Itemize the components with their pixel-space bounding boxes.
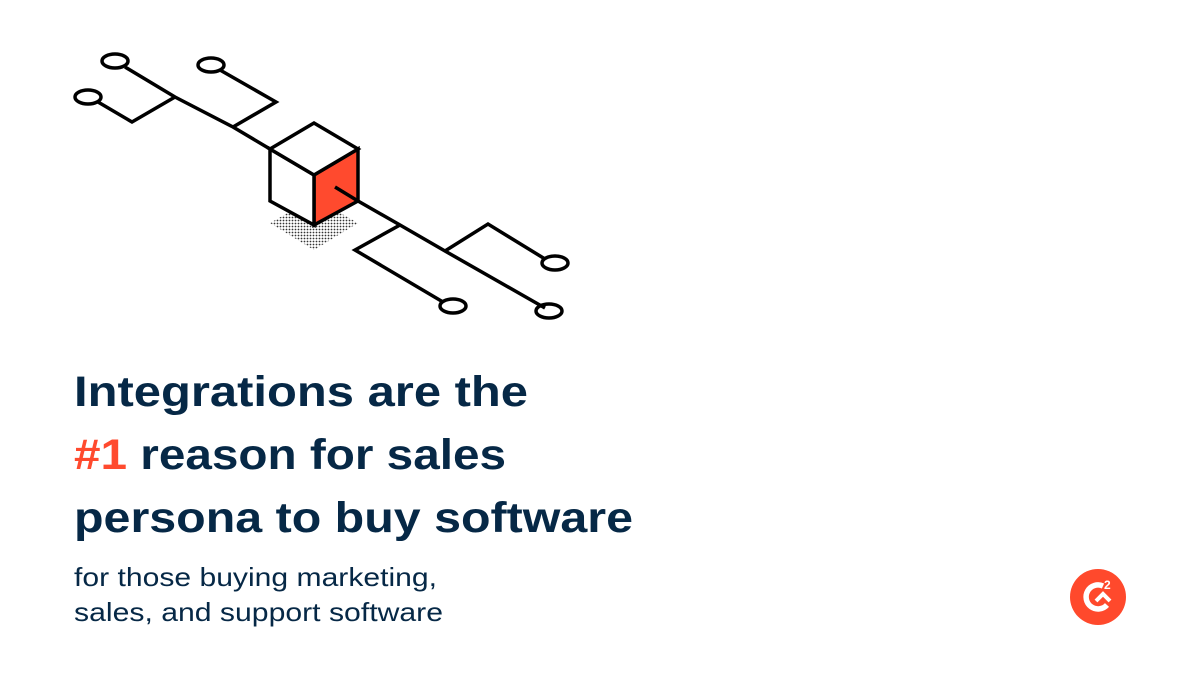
- connectors: lower right: [355, 201, 568, 318]
- title: #1 reason for sales: [74, 431, 506, 479]
- cube: [270, 123, 358, 225]
- subtitle: [74, 562, 443, 627]
- logo: G2: 2: [1104, 578, 1111, 592]
- shadow: dotted diamond: [270, 198, 358, 250]
- connectors: upper left: [75, 54, 276, 149]
- illustration: integration cube network: [75, 54, 568, 318]
- title: [74, 368, 633, 542]
- subtitle: sales, and support software: [74, 597, 443, 627]
- logo: G2: [1070, 569, 1126, 625]
- title: persona to buy software: [74, 494, 633, 542]
- subtitle: for those buying marketing,: [74, 562, 437, 592]
- title: Integrations are the: [74, 368, 528, 416]
